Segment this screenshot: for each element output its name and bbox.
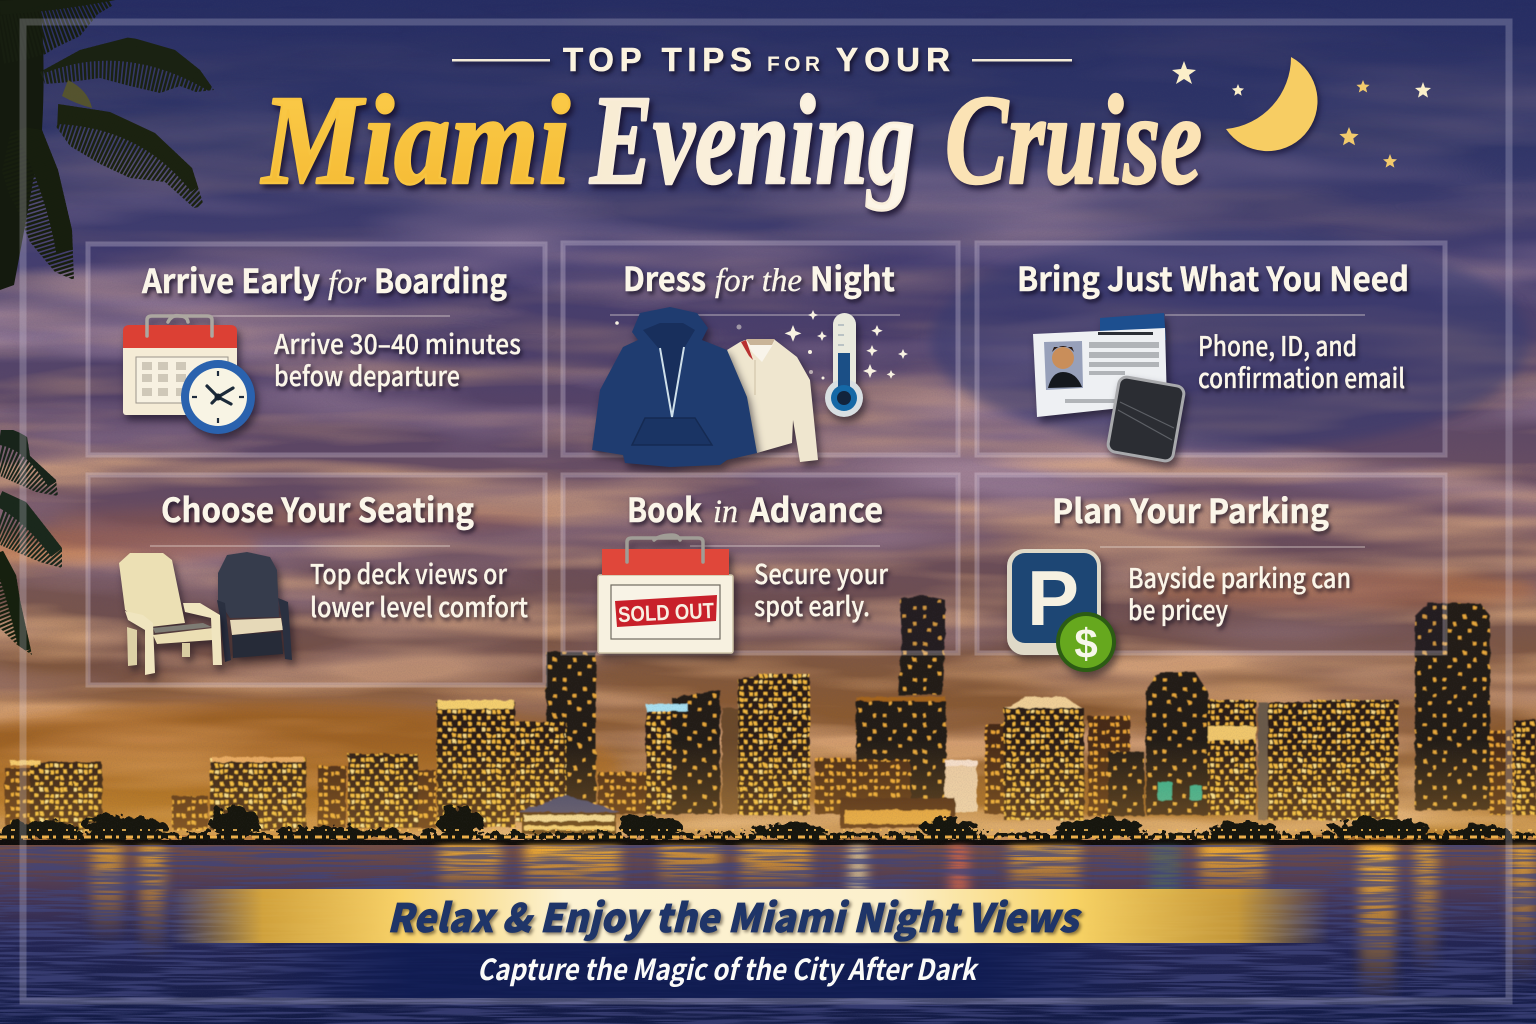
icon: smartphone	[1107, 376, 1185, 462]
frond: top	[40, 0, 116, 55]
heading: dress for the night: for the	[715, 263, 802, 299]
building group: far left hotels	[5, 754, 436, 834]
frond: down	[24, 130, 74, 279]
header: top tips for your: TOP TIPS	[563, 41, 752, 78]
heading: plan your parking: Plan Your Parking	[1052, 485, 1329, 533]
text: bayside parking can be pricey	[1128, 557, 1351, 628]
heading: arrive early for boarding: for	[328, 265, 366, 301]
heading: dress for the night	[623, 253, 895, 301]
heading: book in advance: Book	[627, 484, 702, 532]
panel: bring just what you need	[977, 243, 1445, 462]
text: top deck views or lower level comfort	[310, 553, 528, 625]
heading: book in advance	[627, 484, 883, 532]
text: bayside parking can be pricey: be pricey	[1128, 589, 1228, 628]
text: arrive 30–40 minutes before departure	[274, 323, 521, 394]
icon: dark deck chair	[217, 552, 292, 662]
frond: right arching	[40, 49, 214, 92]
heading: arrive early for boarding: Boarding	[374, 255, 507, 303]
panel: dress for the night	[563, 243, 958, 467]
icon: ID card	[1033, 313, 1167, 417]
text: arrive 30–40 minutes before departure: Arrive 30–40 minutes	[274, 323, 521, 362]
text: arrive 30–40 minutes before departure: befow departure	[274, 355, 460, 394]
icon: cream deck chair	[119, 553, 222, 675]
panel: book in advance	[563, 475, 958, 653]
text: top deck views or lower level comfort: lower level comfort	[310, 586, 528, 625]
text: secure your spot early: spot early.	[754, 585, 870, 624]
icon: sparkle stars	[615, 310, 908, 380]
title: Miami Evening Cruise: Miami	[260, 69, 570, 211]
text: secure your spot early	[754, 553, 889, 624]
banner: relax and enjoy	[170, 888, 1330, 998]
text: phone, ID, and confirmation email: Phone, ID, and	[1198, 325, 1357, 364]
title: Miami Evening Cruise	[260, 69, 1202, 211]
icon: navy hoodie	[592, 307, 757, 467]
text: secure your spot early: Secure your	[754, 553, 889, 592]
heading: book in advance: in	[713, 494, 738, 530]
icon: thermometer	[825, 313, 863, 417]
panel: choose your seating	[88, 475, 545, 685]
text: top deck views or lower level comfort: Top deck views or	[310, 553, 508, 592]
skyline: illuminated Miami towers	[0, 596, 1536, 845]
heading: dress for the night: Night	[810, 253, 895, 301]
icon: sold out calendar: SOLD OUT	[618, 598, 715, 627]
heading: bring just what you need: Bring Just What You Need	[1017, 253, 1409, 301]
building group: right high-rise	[1415, 603, 1536, 815]
shoreline trees and lights	[0, 808, 1536, 845]
heading: choose your seating: Choose Your Seating	[161, 484, 474, 532]
icon: parking sign with dollar badge	[1007, 549, 1116, 672]
icon: crescent moon and stars	[1172, 57, 1431, 168]
title: Miami Evening Cruise: Cruise	[945, 69, 1202, 211]
subheading: capture the magic: Capture the Magic of the City After Dark	[477, 947, 979, 989]
heading: arrive early for boarding: Arrive Early	[141, 255, 320, 303]
header: top tips for your	[452, 41, 1072, 78]
panel: arrive early	[88, 244, 545, 455]
header: top tips for your: FOR	[767, 53, 820, 76]
heading: dress for the night: Dress	[623, 253, 706, 301]
heading: book in advance: Advance	[748, 484, 883, 532]
panel: plan your parking	[977, 475, 1445, 672]
text: bayside parking can be pricey: Bayside parking can	[1128, 557, 1351, 596]
heading: arrive early for boarding	[141, 255, 507, 303]
title: Miami Evening Cruise: Evening	[589, 69, 915, 211]
water with reflections	[0, 845, 1536, 1024]
header: top tips for your: YOUR	[836, 41, 950, 78]
text: phone, ID, and confirmation email	[1198, 325, 1405, 396]
icon: cream sweater	[727, 339, 818, 462]
banner: relax and enjoy: Relax & Enjoy the Miami Night Views	[387, 888, 1082, 944]
building group: central left towers	[437, 652, 851, 827]
palm tree: lower left	[0, 436, 60, 655]
icon: calendar and clock	[123, 316, 255, 434]
pavilion: Bayside marketplace	[518, 795, 620, 834]
text: phone, ID, and confirmation email: confirmation email	[1198, 357, 1405, 396]
palm tree: upper left	[0, 0, 214, 290]
frond: drooping	[58, 108, 204, 205]
building group: twisted tower and center	[840, 596, 977, 828]
icon: parking sign with dollar badge: $	[1074, 620, 1098, 667]
building group: central right towers	[985, 672, 1398, 820]
icon: parking sign with dollar badge: P	[1027, 554, 1079, 642]
icon: sold out calendar	[598, 535, 733, 653]
